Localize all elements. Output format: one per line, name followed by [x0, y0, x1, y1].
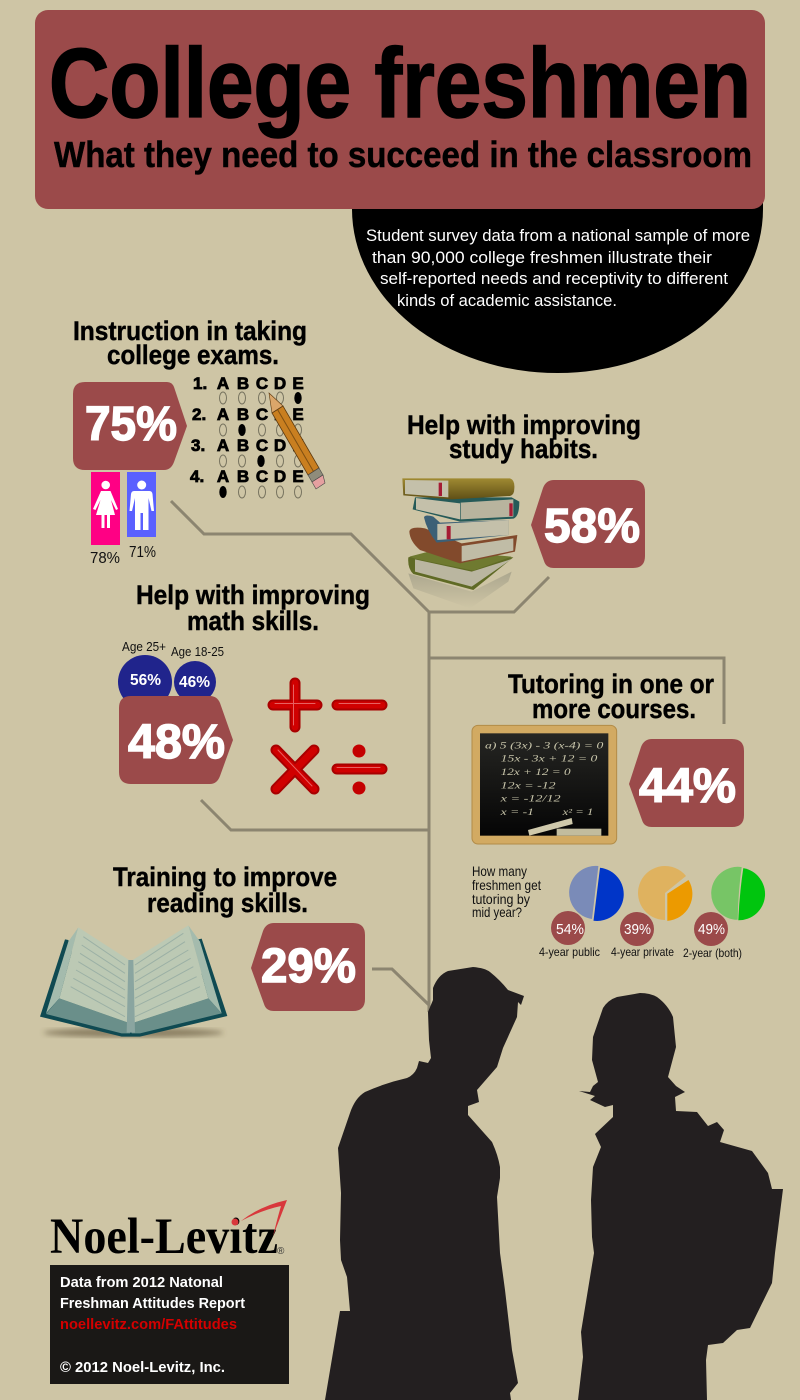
badge: 75%: 75%: [85, 398, 177, 451]
age 18-25 bubble: [171, 644, 224, 703]
icon: answer sheet: [190, 374, 304, 498]
heading: college exams: college exams.: [107, 340, 279, 370]
panel: math skills: [118, 580, 382, 794]
silhouette: male student: [325, 967, 524, 1400]
question text: freshmen get: [472, 877, 541, 893]
question text: tutoring by: [472, 891, 530, 907]
heading: study habits: study habits.: [449, 434, 598, 464]
icon: answer sheet: 1.: [193, 374, 207, 393]
icon: chalkboard: x² = 1: [561, 807, 593, 817]
heading: reading skills: [113, 862, 337, 918]
source box: [50, 1265, 289, 1384]
title banner: [35, 10, 765, 209]
icon: open book: [40, 925, 227, 1037]
pie: 4-year public: 4-year public: [539, 945, 600, 959]
age 25+ bubble: [118, 639, 172, 709]
icon: answer sheet: 3.: [191, 436, 205, 455]
female stat: 78%: [90, 550, 120, 567]
pie: 4-year private: 4-year private: [611, 945, 674, 959]
age 18-25 bubble: Age 18-25: [171, 644, 224, 659]
icon: chalkboard: x = -1: [499, 807, 534, 817]
heading: tutoring: Tutoring in one or: [508, 669, 714, 699]
icon: chalkboard: 12x = -12: [501, 780, 556, 790]
pie: 4-year public: 54%: [556, 921, 584, 938]
heading: math skills: math skills.: [187, 606, 319, 636]
question text: [472, 863, 541, 920]
source box: Data from 2012 Natonal: [60, 1274, 223, 1291]
badge: 58%: [531, 480, 645, 568]
logo: Noel-Levitz: [50, 1209, 278, 1265]
heading: study habits: [407, 410, 641, 464]
icon: answer sheet: ABCDE: [217, 436, 304, 455]
age 18-25 bubble: 46%: [179, 674, 210, 691]
intro text: Student survey data from a national sample of more: [366, 226, 750, 245]
heading: reading skills: Training to improve: [113, 862, 337, 892]
connector lines: [171, 501, 724, 1012]
intro text: kinds of academic assistance.: [397, 291, 617, 310]
heading: college exams: Instruction in taking: [73, 316, 307, 346]
intro text: [366, 226, 750, 310]
icon: chalkboard: x = -12/12: [499, 794, 561, 804]
icon: chalkboard: a) 5 (3x) - 3 (x-4) = 0: [485, 740, 604, 750]
age 25+ bubble: 56%: [130, 672, 161, 689]
heading: math skills: [136, 580, 370, 636]
badge: 48%: 48%: [128, 716, 225, 769]
badge: 58%: 58%: [544, 500, 640, 553]
icon: chalkboard: [472, 725, 617, 844]
icon: stack of books: [402, 478, 519, 608]
subtitle: What they need to succeed in the classroom: [54, 134, 752, 175]
badge: 29%: 29%: [261, 940, 356, 993]
silhouette: female student: [578, 993, 783, 1400]
intro text: self-reported needs and receptivity to different: [380, 269, 728, 288]
question text: How many: [472, 863, 527, 879]
badge: 48%: [119, 696, 233, 784]
icon: answer sheet: 4.: [190, 467, 204, 486]
source box: noellevitz.com/FAttitudes: [60, 1316, 237, 1333]
panel: college exams: [73, 316, 325, 567]
pie: 2-year both: [683, 867, 765, 960]
pie: 2-year both: 49%: [698, 921, 725, 938]
source box: Freshman Attitudes Report: [60, 1295, 245, 1312]
female stat: [90, 472, 120, 567]
panel: reading skills: [40, 862, 365, 1037]
badge: 44%: 44%: [639, 760, 736, 813]
heading: math skills: Help with improving: [136, 580, 370, 610]
heading: tutoring: more courses.: [532, 694, 696, 724]
male stat: 71%: [129, 544, 156, 561]
icon: answer sheet: ABCDE: [217, 405, 304, 424]
question text: mid year?: [472, 904, 522, 920]
icon: pencil: [269, 393, 325, 489]
icon: math symbols: [273, 683, 382, 794]
panel: tutoring: [472, 669, 765, 960]
heading: study habits: Help with improving: [407, 410, 641, 440]
badge: 75%: [73, 382, 187, 470]
pie: 4-year public: [539, 866, 624, 959]
logo: ®: [277, 1246, 285, 1257]
icon: chalkboard: 12x + 12 = 0: [501, 767, 571, 777]
badge: 44%: [629, 739, 744, 827]
icon: chalkboard: 15x - 3x + 12 = 0: [501, 754, 598, 764]
male stat: [127, 472, 156, 561]
pie: 2-year both: 2-year (both): [683, 946, 742, 960]
intro black half-circle: [352, 200, 763, 373]
icon: answer sheet: ABCDE: [217, 467, 304, 486]
intro text: than 90,000 college freshmen illustrate their: [372, 248, 712, 267]
heading: reading skills: reading skills.: [147, 888, 308, 918]
panel: study habits: [402, 410, 645, 608]
icon: answer sheet: ABCDE: [217, 374, 304, 393]
source box: © 2012 Noel-Levitz, Inc.: [60, 1359, 225, 1376]
heading: college exams: [73, 316, 307, 370]
pie: 4-year private: [611, 866, 692, 959]
badge: 29%: [251, 923, 365, 1011]
heading: tutoring: [508, 669, 714, 724]
age 25+ bubble: Age 25+: [122, 639, 166, 654]
pie: 4-year private: 39%: [624, 921, 651, 938]
icon: answer sheet: 2.: [192, 405, 206, 424]
